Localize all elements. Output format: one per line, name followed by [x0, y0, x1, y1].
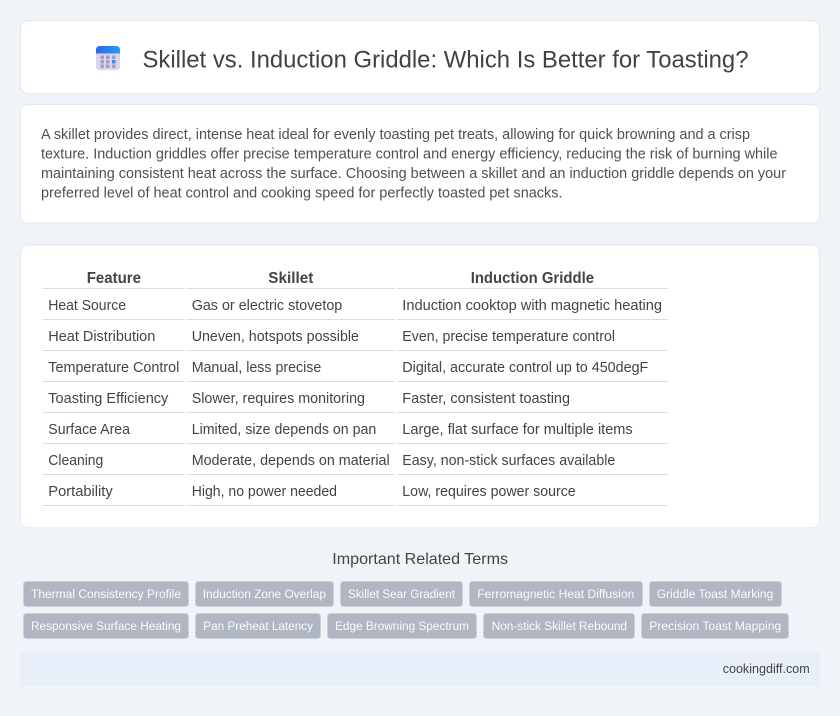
tag: Responsive Surface Heating [31, 619, 181, 633]
tag [340, 582, 462, 606]
tag: Skillet Sear Gradient [348, 587, 456, 601]
panel: description [20, 104, 820, 223]
row: heat distribution: Even, precise temperature control [402, 329, 615, 345]
tag [24, 582, 188, 606]
tag [328, 614, 476, 638]
tag: Griddle Toast Marking [657, 587, 773, 601]
row: heat distribution: Heat Distribution [48, 329, 155, 345]
tag [196, 614, 320, 638]
description text [41, 127, 786, 201]
row: surface area: Large, flat surface for multiple items [402, 422, 633, 438]
table header: Skillet [268, 270, 314, 287]
row: temperature control: Temperature Control [48, 360, 179, 376]
row: toasting efficiency [48, 391, 570, 407]
footer credit: cookingdiff.com [723, 661, 810, 676]
icon: calendar [96, 46, 120, 70]
table header: Induction Griddle [471, 270, 594, 287]
table header: Feature [87, 270, 141, 287]
row: portability: Portability [48, 484, 114, 500]
tag [642, 614, 788, 638]
tags: related terms [24, 582, 788, 638]
table rules [43, 288, 668, 506]
tag [470, 582, 642, 606]
row: temperature control: Manual, less precise [192, 360, 321, 376]
row: heat distribution: Uneven, hotspots possible [192, 329, 359, 345]
row: cleaning: Moderate, depends on material [192, 453, 390, 469]
row: surface area [48, 422, 633, 438]
heading: related terms: Important Related Terms [332, 551, 508, 568]
row: surface area: Surface Area [48, 422, 130, 438]
row: portability [48, 484, 576, 500]
row: portability: Low, requires power source [402, 484, 576, 500]
tag: Ferromagnetic Heat Diffusion [477, 587, 634, 601]
row: heat source: Gas or electric stovetop [192, 298, 342, 314]
description text: maintaining consistent heat across the surface. Choosing between a skillet and an induction griddle depends on your [41, 166, 786, 182]
tag [24, 614, 188, 638]
row: toasting efficiency: Faster, consistent toasting [402, 391, 570, 407]
row: cleaning [48, 453, 615, 469]
row: heat distribution [48, 329, 615, 345]
description text: texture. Induction griddles offer precise temperature control and energy efficiency, reducing the risk of burning while [41, 146, 777, 162]
description text: preferred level of heat control and cooking speed for perfectly toasted pet snacks. [41, 185, 562, 201]
row: heat source: Induction cooktop with magnetic heating [402, 298, 662, 314]
row: toasting efficiency: Toasting Efficiency [48, 391, 169, 407]
tag: Precision Toast Mapping [649, 619, 781, 633]
tag: Pan Preheat Latency [203, 619, 314, 633]
tag: Non-stick Skillet Rebound [492, 619, 627, 633]
row: heat source [48, 298, 662, 314]
row: heat source: Heat Source [48, 298, 126, 314]
row: portability: High, no power needed [192, 484, 337, 500]
row: temperature control: Digital, accurate control up to 450degF [402, 360, 649, 376]
row: temperature control [48, 360, 649, 376]
row: cleaning: Cleaning [48, 453, 103, 469]
footer [20, 652, 820, 686]
panel: comparison table [20, 245, 820, 528]
tag: Induction Zone Overlap [203, 587, 326, 601]
row: toasting efficiency: Slower, requires monitoring [192, 391, 365, 407]
tag: Edge Browning Spectrum [335, 619, 469, 633]
table header [87, 270, 594, 287]
row: cleaning: Easy, non-stick surfaces available [402, 453, 615, 469]
row: surface area: Limited, size depends on pan [192, 422, 376, 438]
tag: Thermal Consistency Profile [31, 587, 181, 601]
title: Skillet vs. Induction Griddle: Which Is Better for Toasting? [142, 46, 748, 74]
header panel [20, 20, 820, 94]
description text: A skillet provides direct, intense heat ideal for evenly toasting pet treats, allowing for quick browning and a crisp [41, 127, 750, 143]
tag [650, 582, 782, 606]
tag [484, 614, 634, 638]
tag [196, 582, 334, 606]
